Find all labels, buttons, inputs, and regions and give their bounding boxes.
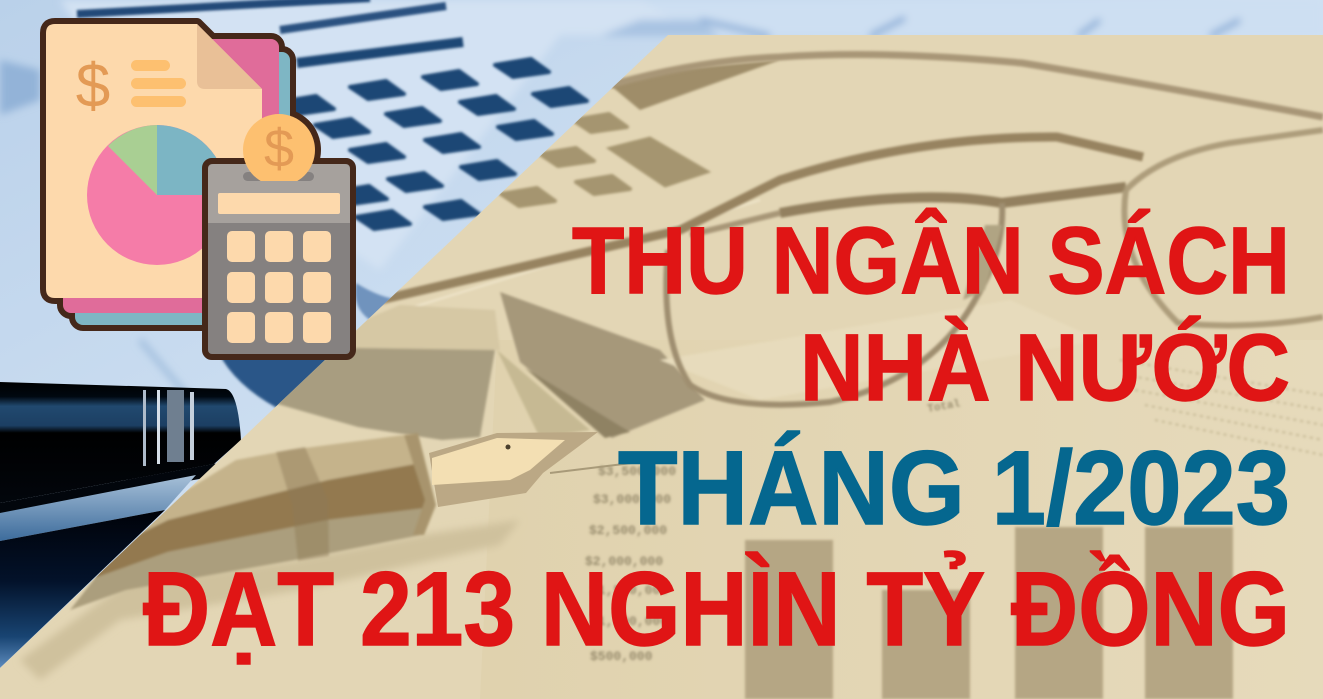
icon: back sheet teal xyxy=(75,52,290,325)
icon: front sheet cream xyxy=(46,24,262,298)
calculator lower edge xyxy=(355,283,420,320)
icon: folded corner xyxy=(197,24,262,89)
shadow under pen xyxy=(274,348,495,440)
title xyxy=(143,207,1290,668)
bar chart in paper xyxy=(745,527,1233,699)
icon: middle sheet pink xyxy=(63,39,279,313)
nib xyxy=(429,432,598,507)
icon: coin: $ xyxy=(264,119,294,179)
icon: calculator xyxy=(205,161,353,357)
icon: sheet outlines xyxy=(46,24,290,325)
glasses xyxy=(380,55,1323,405)
ledger text in chart: $2,500,000 xyxy=(589,523,667,538)
ledger text in chart: $2,000,000 xyxy=(585,554,663,569)
icon: pie chart xyxy=(87,125,227,265)
pen shadow xyxy=(20,520,520,680)
barrel top highlight xyxy=(142,434,414,534)
icon: coin outline xyxy=(237,108,321,192)
black pen cap xyxy=(0,382,241,668)
ledger text in chart: $1,500,000 xyxy=(590,583,668,598)
ledger text in chart xyxy=(585,398,962,664)
icon: coin xyxy=(243,114,315,186)
barrel lower band xyxy=(70,507,434,610)
barrel ring xyxy=(276,447,329,561)
ledger text in chart: $1,000,000 xyxy=(590,614,668,629)
fountain pen xyxy=(20,432,640,680)
ledger text in chart: $500,000 xyxy=(590,649,653,664)
calculator edge xyxy=(418,200,760,306)
chart wedges xyxy=(500,292,705,438)
calculator keys in overlay xyxy=(501,114,710,206)
icon: dollar sign on sheet: $ xyxy=(76,52,110,121)
barrel dark band xyxy=(95,463,434,578)
title line 2: NHÀ NƯỚC xyxy=(800,315,1290,421)
barrel collar xyxy=(404,433,436,535)
ledger text in chart: $3,000,000 xyxy=(593,492,671,507)
title line 3: date: THÁNG 1/2023 xyxy=(618,429,1290,547)
ledger text in chart: Total xyxy=(927,398,962,416)
chart paper xyxy=(480,340,1323,699)
icon: budget documents and calculator xyxy=(46,24,353,357)
dotted table xyxy=(1120,360,1323,455)
icon: text lines on sheet xyxy=(131,60,186,107)
ledger text in chart: $3,500,000 xyxy=(598,464,676,479)
